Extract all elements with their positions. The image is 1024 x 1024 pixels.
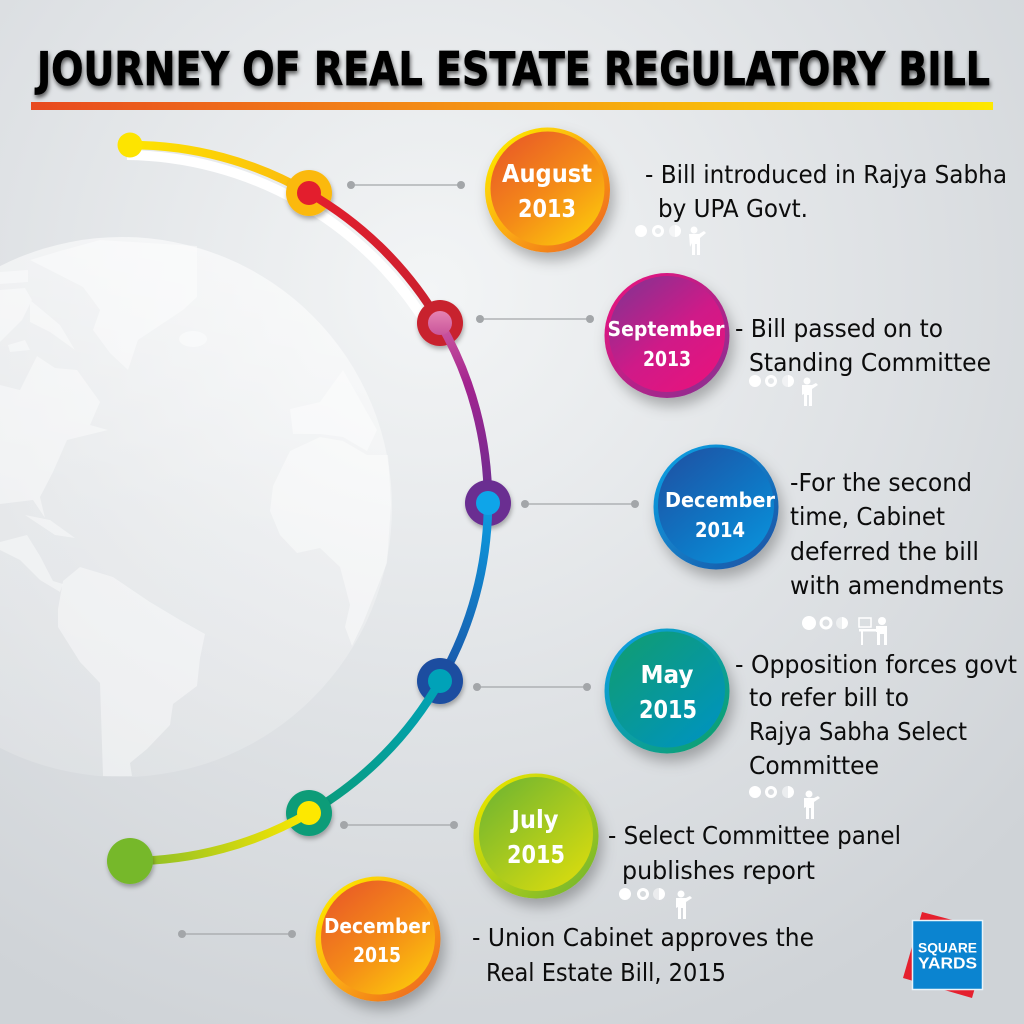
badge: September 2013: 2013 (643, 347, 691, 371)
logo: Square Yards (903, 912, 983, 998)
badge: July 2015: July (510, 805, 558, 834)
node 2 ring (417, 300, 463, 346)
badge: May 2015: 2015 (639, 695, 697, 724)
text: September 2013 (735, 314, 991, 377)
text: December 2014: -For the second (790, 468, 972, 497)
curved timeline (107, 132, 511, 884)
text: September 2013: Standing Committee (749, 348, 991, 377)
node 2 core (428, 311, 452, 335)
text: May 2015: Rajya Sabha Select (749, 717, 967, 746)
title rule (31, 102, 993, 110)
connectors (178, 181, 639, 938)
icon: dots and presenter 3 (749, 786, 820, 819)
text: August 2013: - Bill introduced in Rajya Sabha (645, 160, 1007, 189)
badge: September 2013: September (608, 317, 725, 341)
text: May 2015: Committee (749, 751, 879, 780)
logo: Square Yards: SQUARE (918, 940, 977, 956)
text: December 2015: - Union Cabinet approves the (472, 923, 814, 952)
segment 2 (309, 193, 440, 323)
node 3 core (476, 491, 500, 515)
text: December 2014: deferred the bill (790, 537, 979, 566)
text: August 2013 (645, 160, 1007, 223)
text: July 2015 (608, 821, 901, 885)
node 3 ring (465, 480, 511, 526)
badge: May 2015 (604, 628, 730, 754)
text: December 2015: Real Estate Bill, 2015 (486, 958, 726, 987)
white arc highlight (127, 155, 428, 326)
badge: December 2015: 2015 (353, 943, 401, 967)
badge: September 2013 (604, 273, 730, 398)
node 5 core (297, 801, 321, 825)
segment 1 (130, 145, 309, 193)
text: August 2013: by UPA Govt. (658, 194, 808, 223)
node 4 core (428, 669, 452, 693)
segment 4 (440, 503, 488, 681)
text: July 2015: - Select Committee panel (608, 821, 901, 850)
badge: December 2015 (316, 876, 440, 1002)
node 5 ring (286, 790, 332, 836)
icon: dots and presenter 1 (635, 225, 706, 255)
badge: December 2014: 2014 (695, 518, 745, 542)
text: May 2015 (735, 650, 1017, 780)
node 1 ring (286, 170, 332, 216)
badge: August 2013: 2013 (518, 194, 576, 223)
text: December 2014: time, Cabinet (790, 502, 945, 531)
badge: December 2015: December (324, 914, 431, 938)
logo: Square Yards: YARDS (918, 956, 977, 972)
end dot (107, 838, 153, 884)
text: December 2014 (790, 468, 1004, 600)
icon: dots and presenter 4 (619, 888, 692, 919)
node 1 core (297, 181, 321, 205)
badge: May 2015: May (640, 660, 694, 689)
segment 5 (309, 681, 440, 813)
globe with continents (0, 237, 392, 777)
badge: August 2013 (485, 128, 610, 252)
segment 6 (130, 813, 309, 861)
text: May 2015: - Opposition forces govt (735, 650, 1017, 679)
badge: December 2014 (654, 444, 778, 570)
text: May 2015: to refer bill to (749, 683, 909, 712)
badge: August 2013: August (502, 159, 592, 188)
segment 3 (440, 323, 488, 503)
badge: July 2015 (474, 774, 598, 898)
badge: December 2014: December (665, 488, 776, 512)
icon: dots and presenter 2 (749, 375, 818, 406)
node 4 ring (417, 658, 463, 704)
badge: July 2015: 2015 (507, 840, 565, 869)
start dot (118, 132, 142, 158)
text: September 2013: - Bill passed on to (735, 314, 943, 343)
text: July 2015: publishes report (622, 856, 815, 885)
text: December 2014: with amendments (790, 571, 1004, 600)
text: December 2015 (472, 923, 814, 987)
icon: dots and person at desk (802, 616, 887, 645)
